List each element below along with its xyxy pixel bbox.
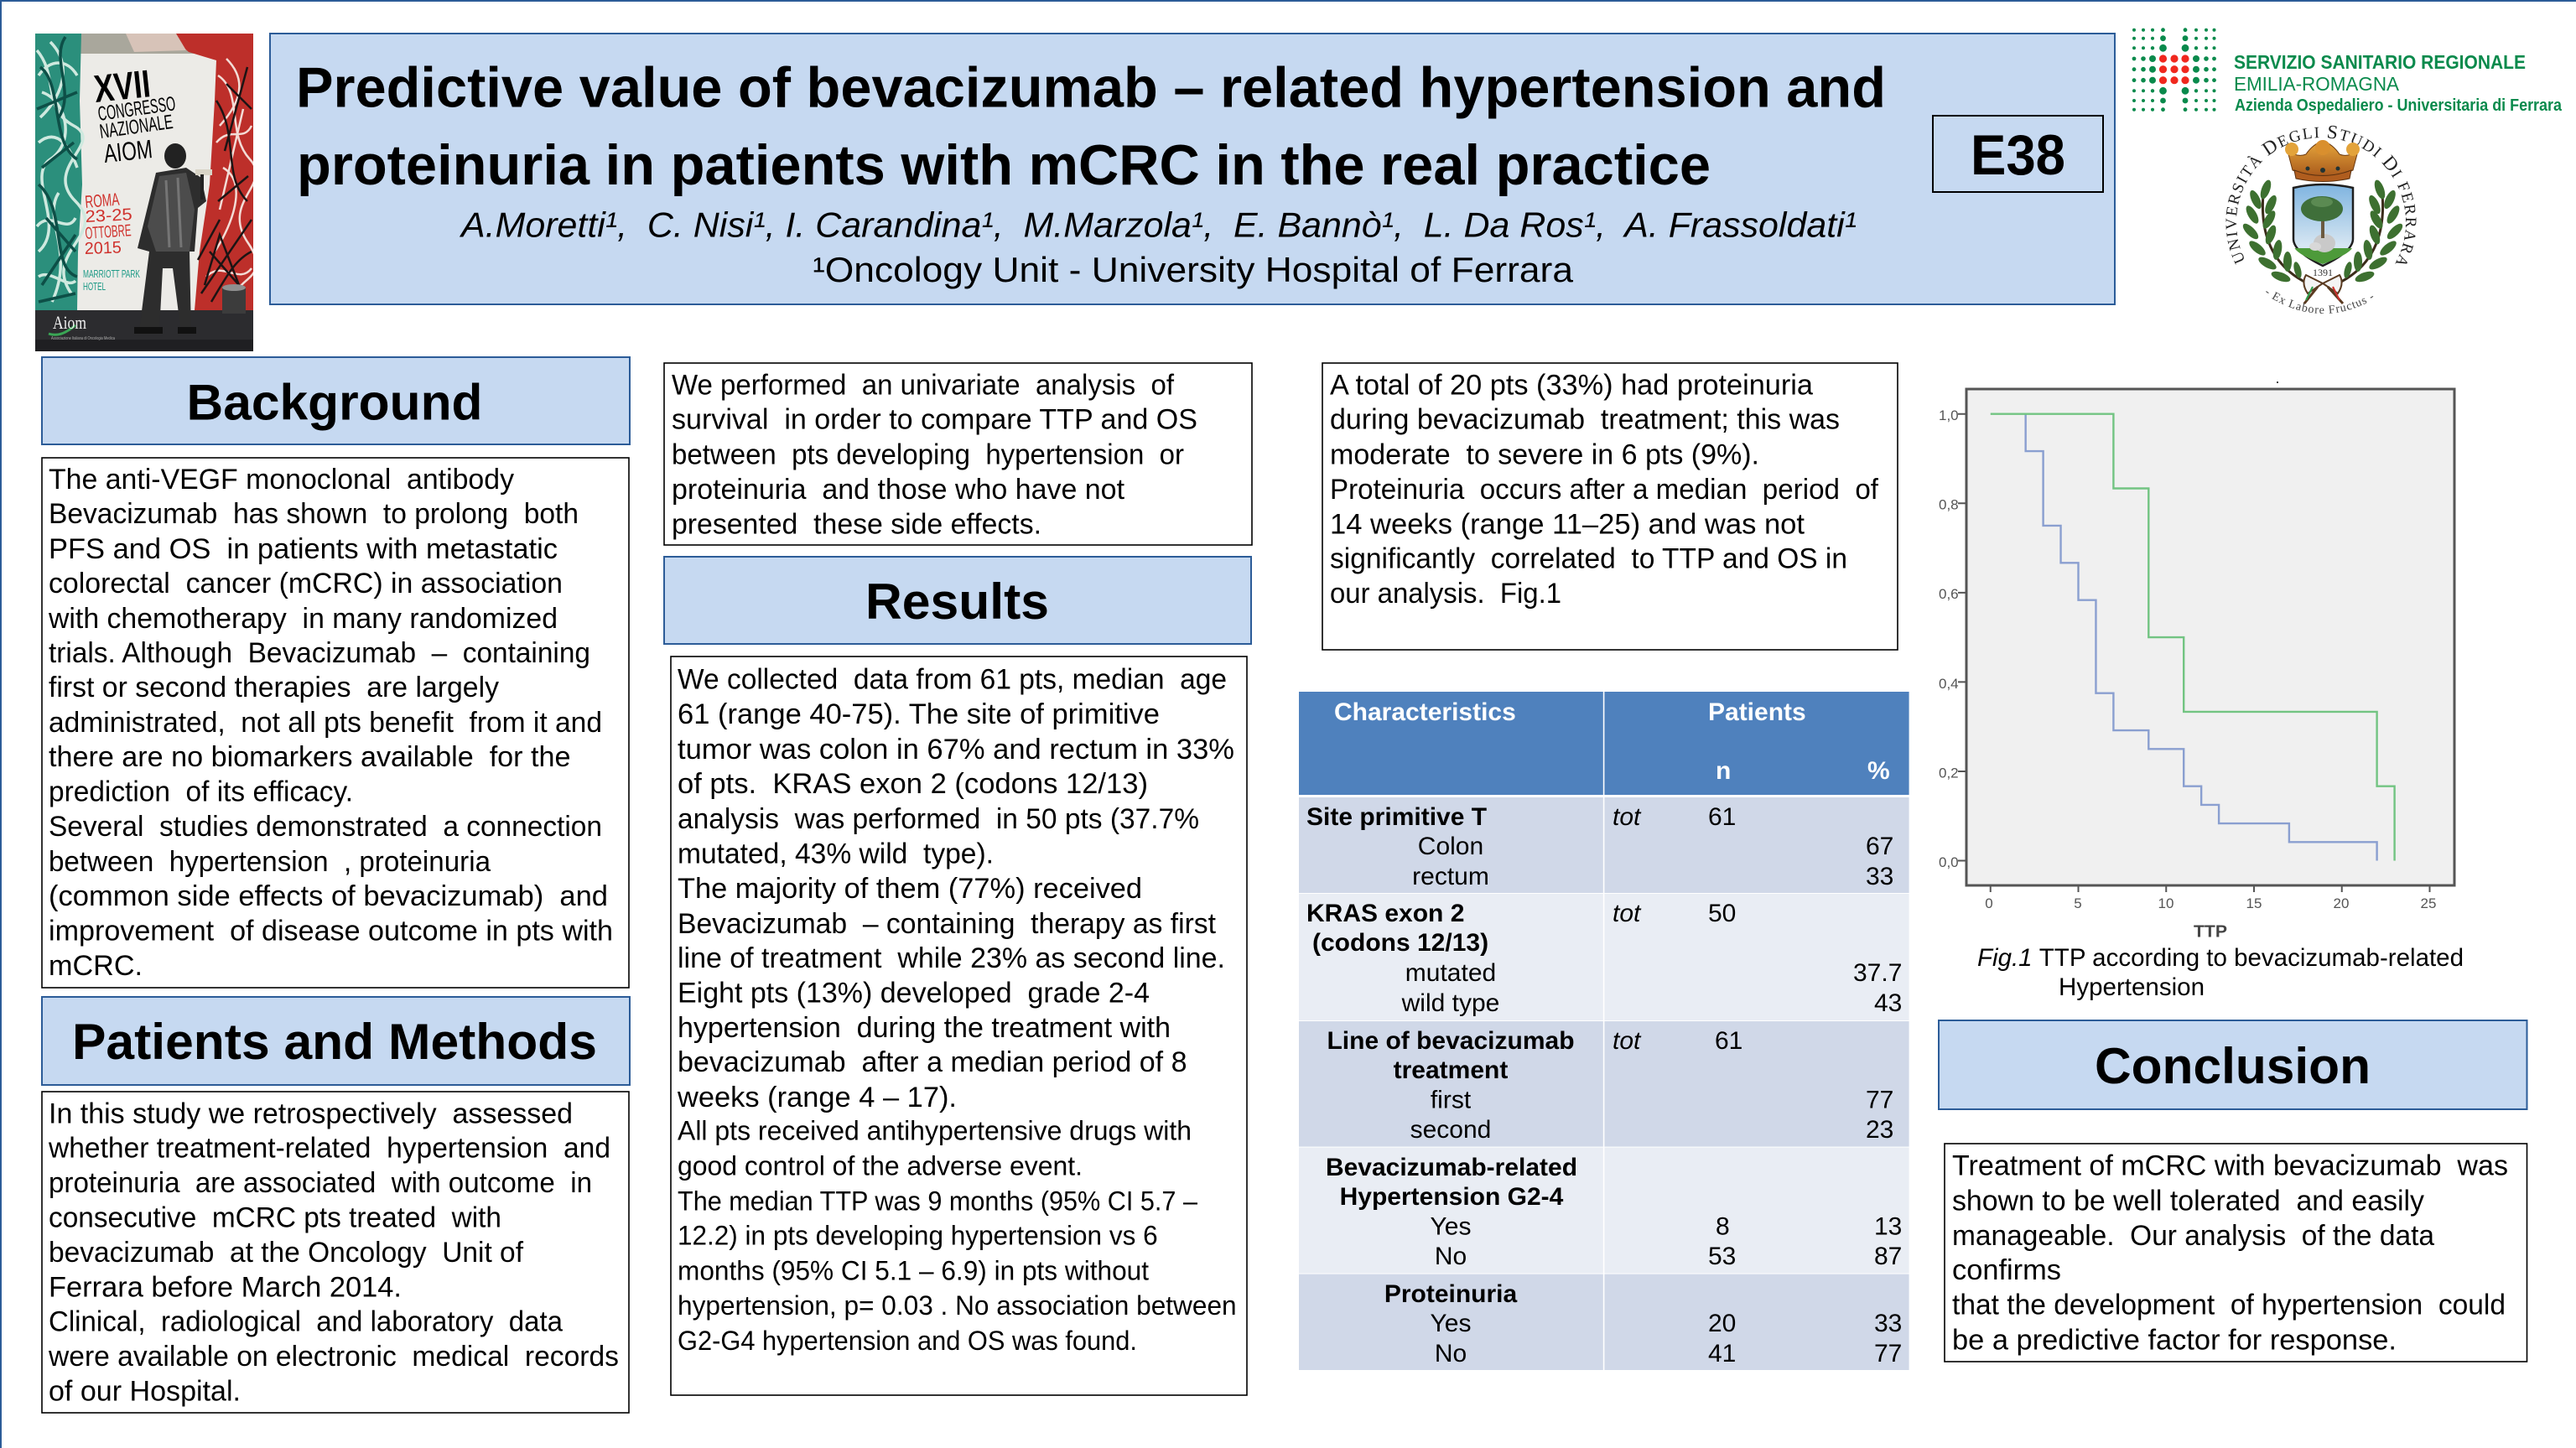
row: site primitive T: Colon	[1418, 833, 1483, 860]
poster painter figure	[134, 143, 246, 334]
image: AIOM congress poster: ROMA	[84, 189, 120, 212]
image: AIOM congress poster: OTTOBRE	[85, 221, 132, 243]
heading: Conclusion: Conclusion	[2095, 1038, 2371, 1094]
y axis labels: 0,4	[1939, 676, 1959, 692]
panel: proteinuria text: Proteinuria occurs after a median period of	[1330, 474, 1878, 506]
row: KRAS exon 2: tot	[1613, 900, 1642, 927]
y axis labels: 0,0	[1939, 854, 1959, 870]
x axis labels: 25	[2421, 895, 2436, 911]
poster code box: E38	[1971, 123, 2065, 187]
heading: Results	[664, 557, 1251, 644]
table header: %	[1867, 757, 1890, 785]
row: line of bevacizumab treatment: second	[1410, 1116, 1491, 1144]
panel: results text: 12.2) in pts developing hypertension vs 6	[678, 1221, 1158, 1251]
table header	[1299, 692, 1909, 795]
row: site primitive T: 67	[1866, 833, 1893, 860]
y axis labels	[1939, 407, 1959, 870]
logo: Servizio Sanitario Regionale: EMILIA-ROMAGNA	[2234, 73, 2400, 95]
logo: Servizio Sanitario Regionale: SERVIZIO SANITARIO REGIONALE	[2234, 51, 2526, 73]
panel: background text: trials. Although Bevacizumab – containing	[49, 637, 590, 669]
x axis labels: 20	[2334, 895, 2349, 911]
panel: univariate analysis text: presented these side effects.	[672, 508, 1041, 540]
row: KRAS exon 2: wild type	[1401, 989, 1499, 1017]
panel: results text: Eight pts (13%) developed grade 2-4	[678, 977, 1150, 1009]
row: line of bevacizumab treatment: Line of bevacizumab	[1327, 1027, 1575, 1055]
row: proteinuria: 41	[1708, 1340, 1736, 1368]
panel: conclusion text: Treatment of mCRC with bevacizumab was	[1952, 1150, 2508, 1182]
heading: Patients and Methods	[42, 997, 630, 1085]
y axis labels: 0,6	[1939, 586, 1959, 602]
panel: univariate analysis text	[664, 363, 1252, 545]
panel: conclusion text: manageable. Our analysis of the data	[1952, 1220, 2435, 1252]
panel: results text: of pts. KRAS exon 2 (codons 12/13)	[678, 768, 1148, 800]
panel: background text	[42, 458, 629, 988]
image: AIOM congress poster: XVII	[92, 61, 153, 111]
panel: results text	[671, 657, 1247, 1395]
image: AIOM congress poster: Associazione Italiana di Oncologia Medica	[51, 336, 115, 341]
row: hypertension G2-4: 8	[1716, 1212, 1730, 1241]
panel: results text: The majority of them (77%) received	[678, 873, 1142, 905]
panel: title banner	[270, 34, 2115, 304]
y axis labels: 0,8	[1939, 496, 1959, 513]
table header: Characteristics	[1334, 698, 1516, 726]
row: hypertension G2-4	[1299, 1148, 1909, 1274]
panel: background text: there are no biomarkers available for the	[49, 741, 570, 773]
title: proteinuria in patients with mCRC in the real practice	[297, 133, 1711, 197]
panel: results text: bevacizumab after a median period of 8	[678, 1046, 1187, 1078]
row: KRAS exon 2: KRAS exon 2	[1306, 900, 1464, 927]
row: proteinuria: No	[1435, 1340, 1467, 1368]
x axis labels: 0	[1985, 895, 1993, 911]
panel: results text: Bevacizumab – containing therapy as first	[678, 908, 1216, 940]
icon: ribbon bow: 1391	[2313, 267, 2333, 278]
row: hypertension G2-4: 87	[1874, 1243, 1902, 1270]
row: hypertension G2-4: Yes	[1431, 1212, 1471, 1241]
row: line of bevacizumab treatment: first	[1431, 1087, 1472, 1113]
x axis labels: 10	[2158, 895, 2174, 911]
panel: background text: The anti-VEGF monoclonal antibody	[49, 464, 515, 496]
icon: right laurel branch	[2338, 179, 2405, 284]
row: proteinuria: Proteinuria	[1384, 1280, 1517, 1308]
logo: University of Ferrara crest: UNIVERSITÀ DEGLI STUDI DI FERRARA	[2225, 126, 2417, 265]
row: hypertension G2-4: 53	[1708, 1243, 1736, 1270]
x axis labels: 15	[2246, 895, 2262, 911]
y axis labels: 1,0	[1939, 407, 1959, 423]
row: proteinuria: 77	[1874, 1340, 1902, 1368]
figure caption	[1977, 944, 2464, 1001]
title	[296, 55, 1886, 197]
panel: results text: 61 (range 40-75). The site of primitive	[678, 698, 1160, 730]
panel: results text: weeks (range 4 – 17).	[677, 1082, 957, 1113]
panel: conclusion text	[1945, 1144, 2527, 1362]
row: line of bevacizumab treatment: 23	[1866, 1116, 1893, 1144]
panel: proteinuria text: 14 weeks (range 11–25) and was not	[1330, 508, 1805, 540]
panel: patients and methods text: whether treatment-related hypertension and	[48, 1133, 610, 1165]
panel: results text: line of treatment while 23% as second line.	[678, 942, 1225, 974]
row: site primitive T: rectum	[1412, 863, 1489, 890]
row: KRAS exon 2	[1299, 894, 1909, 1020]
panel: background text: PFS and OS in patients with metastatic	[49, 533, 558, 565]
row: hypertension G2-4: No	[1435, 1243, 1467, 1270]
panel: background text: prediction of its efficacy.	[49, 776, 353, 808]
image: AIOM congress poster: CONGRESSO	[96, 92, 177, 126]
panel: background text: colorectal cancer (mCRC) in association	[49, 568, 563, 599]
panel: patients and methods text: consecutive mCRC pts treated with	[49, 1201, 501, 1233]
row: hypertension G2-4: Hypertension G2-4	[1340, 1183, 1564, 1211]
heading: Conclusion	[1939, 1020, 2527, 1109]
panel: results text: G2-G4 hypertension and OS was found.	[678, 1326, 1137, 1356]
panel: patients and methods text: Clinical, radiological and laboratory data	[49, 1306, 564, 1338]
panel: results text: mutated, 43% wild type).	[678, 838, 994, 870]
panel: conclusion text: that the development of hypertension could	[1952, 1290, 2506, 1321]
row: line of bevacizumab treatment	[1299, 1021, 1909, 1147]
row: proteinuria: 33	[1874, 1310, 1902, 1337]
curve: hypertension	[1991, 414, 2395, 860]
x axis labels: 5	[2074, 895, 2082, 911]
panel: background text: Several studies demonstrated a connection	[49, 811, 602, 843]
figure caption: Hypertension	[2059, 973, 2205, 1001]
panel: background text: administrated, not all pts benefit from it and	[49, 707, 602, 739]
panel: conclusion text: be a predictive factor for response.	[1952, 1324, 2397, 1356]
heading: Results: Results	[865, 573, 1049, 630]
table header: Patients	[1708, 698, 1806, 726]
image: AIOM congress poster	[35, 34, 257, 351]
row: site primitive T: tot	[1613, 803, 1642, 831]
x axis labels	[1985, 895, 2436, 941]
panel: results text: All pts received antihypertensive drugs with	[678, 1116, 1192, 1146]
panel: univariate analysis text: survival in order to compare TTP and OS	[672, 404, 1197, 436]
row: line of bevacizumab treatment: treatment	[1394, 1056, 1508, 1084]
panel: results text: We collected data from 61 pts, median age	[678, 664, 1227, 696]
row: proteinuria: 20	[1708, 1310, 1736, 1337]
panel: patients and methods text: were available on electronic medical records	[48, 1341, 619, 1373]
panel: proteinuria text: during bevacizumab treatment; this was	[1330, 404, 1840, 436]
heading: Background: Background	[186, 374, 483, 431]
row: site primitive T	[1299, 797, 1909, 893]
panel: patients and methods text	[42, 1092, 629, 1413]
panel: patients and methods text: bevacizumab at the Oncology Unit of	[49, 1237, 523, 1269]
table header: n	[1716, 757, 1731, 785]
panel: background text: improvement of disease outcome in pts with	[49, 916, 613, 947]
image: AIOM congress poster: NAZIONALE	[98, 111, 174, 143]
logo: University of Ferrara crest: - Ex Labore Fructus -	[2266, 291, 2373, 314]
panel: patients and methods text: Ferrara before March 2014.	[49, 1271, 402, 1303]
icon: ribbon bow	[2303, 267, 2343, 304]
authors: A.Moretti¹, C. Nisi¹, I. Carandina¹, M.Marzola¹, E. Bannò¹, L. Da Ros¹, A. Frassoldati¹	[459, 205, 1857, 245]
table: patient characteristics	[1299, 692, 1909, 1370]
panel: patients and methods text: In this study we retrospectively assessed	[49, 1098, 573, 1129]
row: KRAS exon 2: (codons 12/13)	[1312, 929, 1488, 957]
curve: no hypertension	[2026, 414, 2377, 860]
panel: background text: between hypertension , proteinuria	[49, 846, 491, 878]
heading: Background	[42, 357, 630, 444]
panel: background text: (common side effects of bevacizumab) and	[49, 880, 608, 912]
panel: results text: hypertension, p= 0.03 . No association between	[678, 1290, 1237, 1321]
panel: results text: hypertension during the treatment with	[678, 1012, 1171, 1044]
row: line of bevacizumab treatment: 61	[1715, 1027, 1742, 1055]
icon: crown	[2285, 140, 2360, 181]
row: site primitive T: 33	[1866, 863, 1893, 890]
panel: results text: tumor was colon in 67% and rectum in 33%	[678, 734, 1234, 766]
image: AIOM congress poster: 23-25	[85, 205, 132, 226]
row: proteinuria: Yes	[1431, 1310, 1471, 1337]
panel: background text: first or second therapies are largely	[49, 672, 500, 703]
row: line of bevacizumab treatment: 77	[1866, 1087, 1893, 1113]
panel: proteinuria text	[1322, 363, 1898, 650]
affiliation: ¹Oncology Unit - University Hospital of Ferrara	[813, 250, 1574, 289]
panel: univariate analysis text: between pts developing hypertension or	[672, 439, 1184, 470]
panel: patients and methods text: proteinuria are associated with outcome in	[49, 1167, 592, 1199]
panel: conclusion text: shown to be well tolerated and easily	[1952, 1185, 2425, 1217]
panel: proteinuria text: significantly correlated to TTP and OS in	[1330, 542, 1847, 574]
image: AIOM congress poster: Aiom	[53, 312, 86, 333]
panel: univariate analysis text: proteinuria and those who have not	[672, 474, 1124, 506]
panel: univariate analysis text: We performed an univariate analysis of	[672, 369, 1174, 401]
row: proteinuria	[1299, 1274, 1909, 1370]
y axis labels: 0,2	[1939, 765, 1959, 781]
icon: dot matrix	[2132, 28, 2216, 112]
panel: proteinuria text: our analysis. Fig.1	[1330, 578, 1561, 610]
poster code box	[1933, 116, 2103, 192]
row: KRAS exon 2: mutated	[1405, 959, 1496, 987]
panel: background text: mCRC.	[49, 950, 143, 982]
panel: results text: The median TTP was 9 months (95% CI 5.7 –	[678, 1186, 1198, 1216]
heading: Patients and Methods: Patients and Methods	[72, 1014, 597, 1070]
title: Predictive value of bevacizumab – related hypertension and	[296, 55, 1886, 119]
panel: patients and methods text: of our Hospital.	[49, 1376, 241, 1408]
panel: results text: months (95% CI 5.1 – 6.9) in pts without	[678, 1256, 1149, 1286]
chart: Kaplan-Meier TTP curves	[1939, 381, 2454, 941]
logo: Servizio Sanitario Regionale	[2132, 28, 2563, 115]
image: AIOM congress poster: HOTEL	[83, 280, 106, 293]
image: AIOM congress poster: 2015	[84, 238, 122, 258]
image: AIOM congress poster: AIOM	[102, 134, 153, 169]
panel: results text: analysis was performed in 50 pts (37.7%	[678, 803, 1199, 835]
row: hypertension G2-4: 13	[1874, 1212, 1902, 1241]
panel: background text: Bevacizumab has shown to prolong both	[49, 498, 579, 530]
icon: shield	[2293, 184, 2353, 266]
row: KRAS exon 2: 50	[1708, 900, 1736, 927]
panel: proteinuria text: moderate to severe in 6 pts (9%).	[1330, 439, 1759, 470]
icon: left laurel branch	[2241, 179, 2308, 284]
panel: conclusion text: confirms	[1952, 1254, 2061, 1286]
panel: background text: with chemotherapy in many randomized	[48, 603, 558, 635]
row: KRAS exon 2: 43	[1874, 989, 1902, 1017]
row: site primitive T: Site primitive T	[1306, 803, 1487, 831]
row: hypertension G2-4: Bevacizumab-related	[1326, 1154, 1577, 1181]
panel: proteinuria text: A total of 20 pts (33%) had proteinuria	[1330, 369, 1814, 401]
image: AIOM congress poster: MARRIOTT PARK	[83, 267, 140, 280]
panel: results text: good control of the adverse event.	[678, 1150, 1083, 1181]
figure caption: Fig.1 TTP according to bevacizumab-related	[1977, 944, 2464, 972]
row: KRAS exon 2: 37.7	[1853, 959, 1902, 987]
row: site primitive T: 61	[1708, 803, 1736, 831]
row: line of bevacizumab treatment: tot	[1613, 1027, 1642, 1055]
x axis labels: TTP	[2194, 922, 2227, 941]
